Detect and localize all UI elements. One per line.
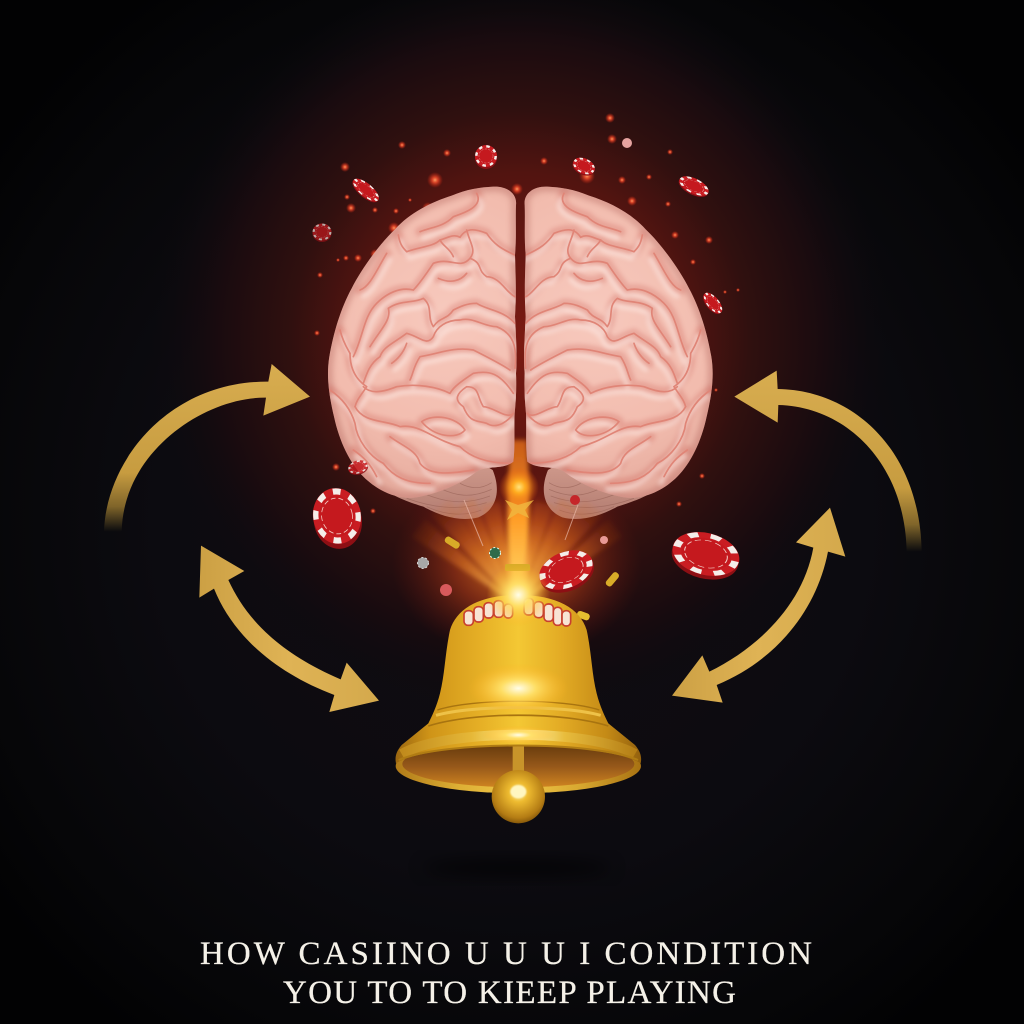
energy haze and central beam (392, 440, 642, 660)
title (200, 936, 812, 1011)
bell body (396, 595, 641, 763)
chip: left dim (312, 224, 332, 242)
bell (396, 563, 641, 823)
bell rim lip (396, 739, 641, 793)
arrow: lower left two-way (199, 546, 379, 712)
arrow: top left (104, 364, 310, 532)
chip: large right (667, 525, 744, 586)
chip: large left (309, 484, 366, 553)
chip: above bell (533, 543, 600, 600)
arrow: top right (734, 371, 922, 552)
arrow: lower right two-way (672, 508, 845, 703)
chip: right edge (700, 290, 726, 317)
small pale chips (622, 138, 632, 148)
chip: top right 2 (676, 172, 712, 201)
chips on bell crown (464, 598, 571, 626)
glowing orb (499, 467, 539, 507)
left hemisphere (328, 187, 519, 519)
needle lines (464, 500, 578, 546)
clapper stem (513, 742, 524, 773)
chip: brain lower left (347, 458, 370, 477)
crown flash (487, 563, 550, 627)
chip: top centre (475, 145, 497, 169)
floating casino chips (309, 138, 744, 621)
light rays (412, 498, 622, 614)
bell opening (402, 741, 634, 787)
light rays, orb and star (412, 467, 622, 614)
brain (328, 187, 713, 519)
right hemisphere (522, 187, 713, 519)
title line 1: HOW CASIINO U U U I CONDITION (200, 936, 812, 972)
star glyph (505, 500, 534, 520)
gold coins (444, 535, 461, 550)
title line 2: YOU TO TO KIEEP PLAYING (283, 975, 736, 1011)
bell body highlights (468, 663, 568, 713)
clapper ball (492, 770, 545, 823)
red spark particles (314, 113, 740, 514)
chip: top left (349, 175, 382, 206)
chip: top right 1 (570, 154, 598, 179)
bell bands (437, 701, 599, 710)
